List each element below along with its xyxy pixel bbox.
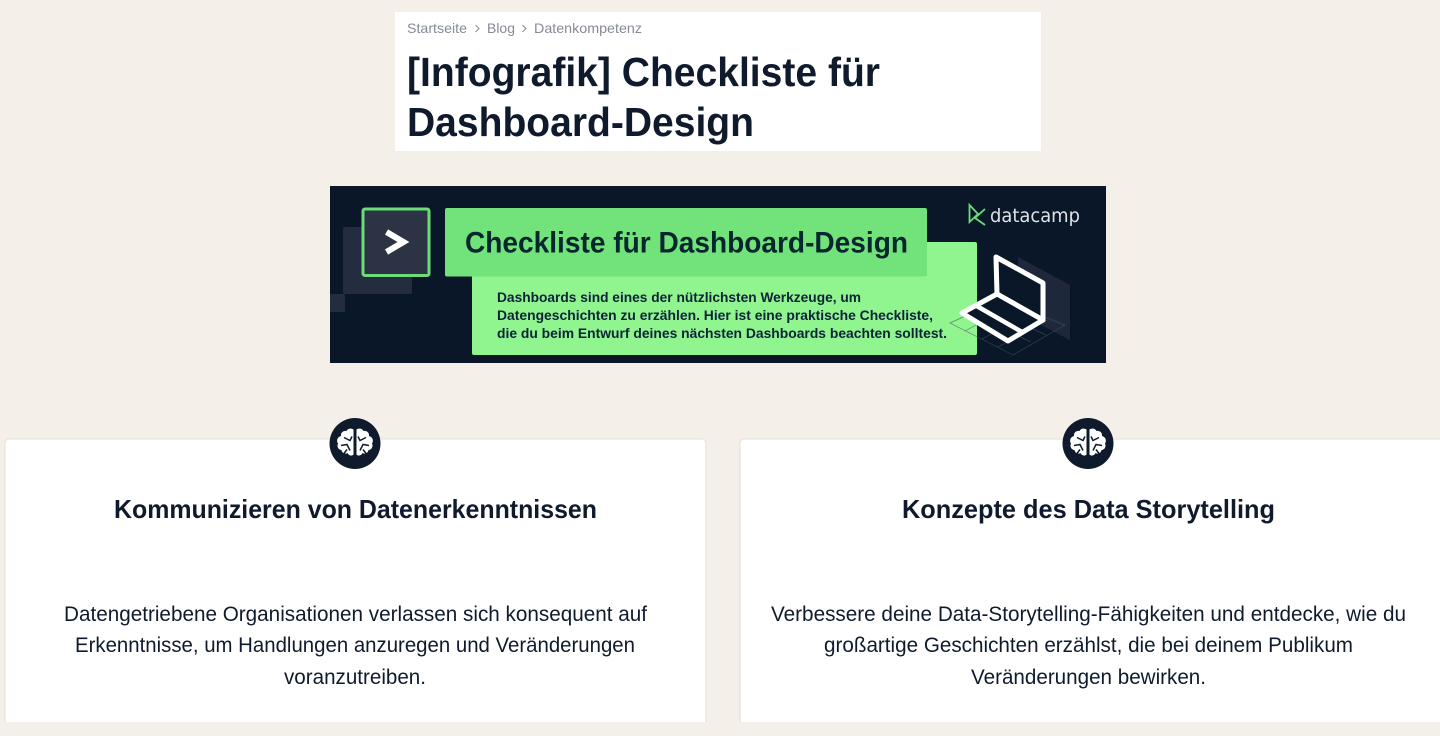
breadcrumb: Blog <box>487 20 515 36</box>
heading: Kommunizieren von Datenerkenntnissen <box>114 494 597 524</box>
banner description box: Dashboards sind eines der nützlichsten Werkzeuge, um <box>497 290 861 305</box>
banner description box: Datengeschichten zu erzählen. Hier ist eine praktische Checkliste, <box>497 308 933 323</box>
body text: Veränderungen bewirken. <box>971 666 1206 689</box>
banner description box: die du beim Entwurf deines nächsten Dashboards beachten solltest. <box>497 326 947 341</box>
title <box>407 49 880 145</box>
breadcrumb: Datenkompetenz <box>534 20 642 36</box>
body text: Verbessere deine Data-Storytelling-Fähigkeiten und entdecke, wie du <box>771 603 1406 626</box>
title: [Infografik] Checkliste für <box>407 49 880 95</box>
banner <box>330 186 1106 363</box>
body text <box>64 603 647 689</box>
banner title box: Checkliste für Dashboard-Design <box>465 226 908 260</box>
panel: communicating data insights <box>5 418 706 729</box>
banner title box <box>445 208 927 276</box>
body text: Datengetriebene Organisationen verlassen sich konsequent auf <box>64 603 647 626</box>
title: Dashboard-Design <box>407 99 754 145</box>
icon: laptop <box>950 257 1070 355</box>
icon: brain <box>330 418 380 469</box>
body text: Erkenntnisse, um Handlungen anzuregen und Veränderungen <box>75 634 635 657</box>
body text <box>771 603 1406 689</box>
icon: brain <box>1062 418 1114 469</box>
body text: großartige Geschichten erzählst, die bei deinem Publikum <box>824 634 1353 657</box>
panel: data storytelling concepts <box>740 418 1440 729</box>
body text: voranzutreiben. <box>284 666 426 689</box>
page header panel <box>395 12 1041 151</box>
icon: terminal prompt <box>330 209 429 312</box>
breadcrumb: Startseite <box>407 20 467 36</box>
breadcrumb <box>407 20 642 36</box>
datacamp logo: datacamp <box>990 205 1080 227</box>
banner description box <box>472 242 977 355</box>
heading: Konzepte des Data Storytelling <box>902 494 1275 524</box>
